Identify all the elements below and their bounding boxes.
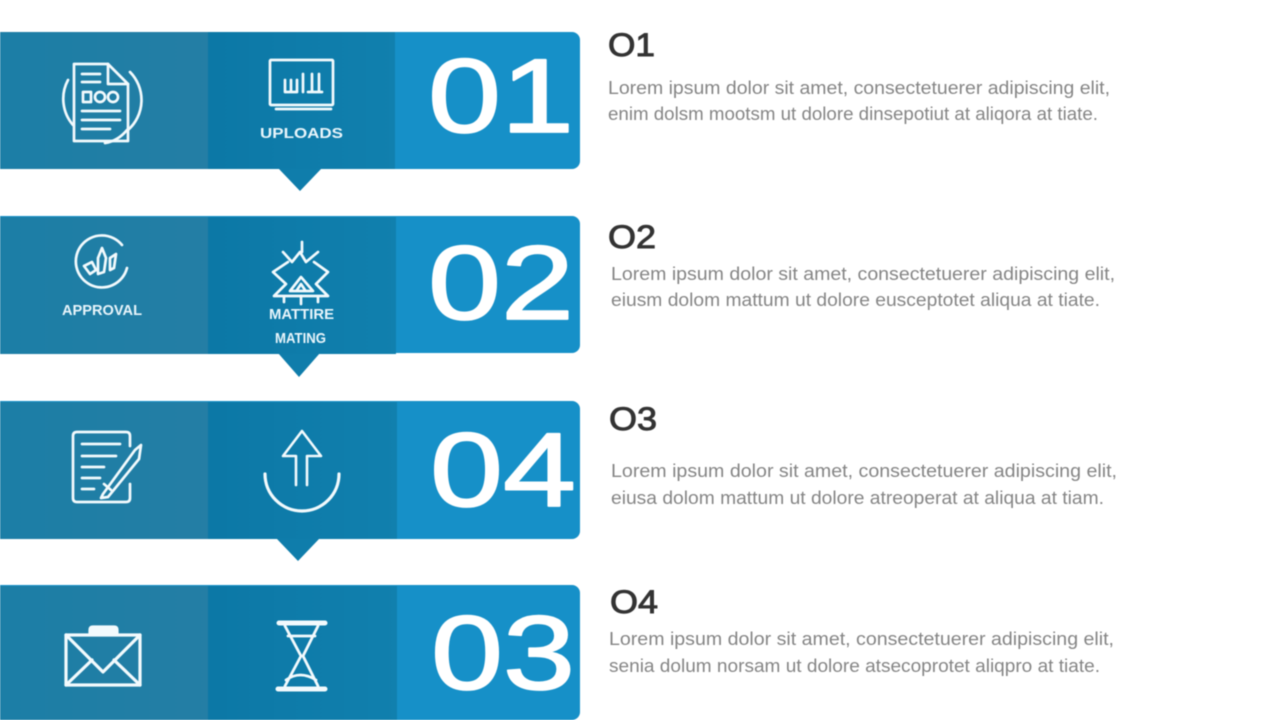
icon: document in circle (63, 64, 141, 143)
text block: step 03 description (609, 401, 1117, 508)
text block: step 04 description (609, 584, 1114, 676)
heading: O3: O3 (609, 401, 657, 437)
icon: upload arrow with arc (265, 431, 339, 511)
body line 2: senia dolum norsam ut dolore atsecoprotet aliqpro at tiate. (609, 656, 1100, 676)
label: approval: APPROVAL (62, 302, 142, 319)
text block: step 01 description (608, 27, 1110, 124)
body line 1: Lorem ipsum dolor sit amet, consectetuerer adipiscing elit, (611, 461, 1117, 481)
icon: note and pencil (73, 432, 141, 502)
banner background: step 02 (0, 216, 580, 353)
icon: hourglass (278, 623, 325, 689)
arrow: step 02 pointer (278, 353, 320, 377)
number: 03: 03 (431, 595, 575, 712)
number: 04: 04 (430, 412, 576, 529)
icon: monitor (270, 60, 333, 109)
banner background: step 01 (0, 32, 580, 169)
body line 2: enim dolsm mootsm ut dolore dinsepotiut at aliqora at tiate. (608, 104, 1098, 124)
body line 1: Lorem ipsum dolor sit amet, consectetuerer adipiscing elit, (609, 629, 1114, 649)
icon: star with tent (273, 242, 328, 304)
icon: envelope case (66, 627, 140, 685)
icon: approval circle (76, 235, 127, 287)
body line 1: Lorem ipsum dolor sit amet, consectetuerer adipiscing elit, (611, 264, 1115, 284)
body line 2: eiusa dolom mattum ut dolore atreoperat at aliqua at tiam. (611, 488, 1104, 508)
arrow: step 03 pointer (277, 539, 319, 561)
number: 01: 01 (428, 38, 574, 155)
panel: step 01 banner (0, 32, 580, 191)
arrow: step 01 pointer (279, 169, 321, 191)
panel: step 03 banner (0, 401, 580, 561)
heading: O2: O2 (608, 219, 656, 255)
label: mating: MATING (275, 330, 326, 347)
panel: step 02 banner (0, 216, 580, 377)
heading: O1: O1 (608, 27, 655, 63)
label: uploads: UPLOADS (260, 125, 343, 142)
banner background: step 03 (0, 401, 580, 539)
text block: step 02 description (608, 219, 1115, 310)
panel: step 04 banner (0, 585, 580, 720)
label: mature: MATTIRE (269, 306, 334, 323)
body line 2: eiusm dolom mattum ut dolore eusceptotet aliqua at tiate. (611, 290, 1100, 310)
body line 1: Lorem ipsum dolor sit amet, consectetuerer adipiscing elit, (608, 78, 1110, 98)
heading: O4: O4 (610, 584, 658, 620)
banner background: step 04 (0, 585, 580, 720)
number: 02: 02 (428, 225, 574, 342)
